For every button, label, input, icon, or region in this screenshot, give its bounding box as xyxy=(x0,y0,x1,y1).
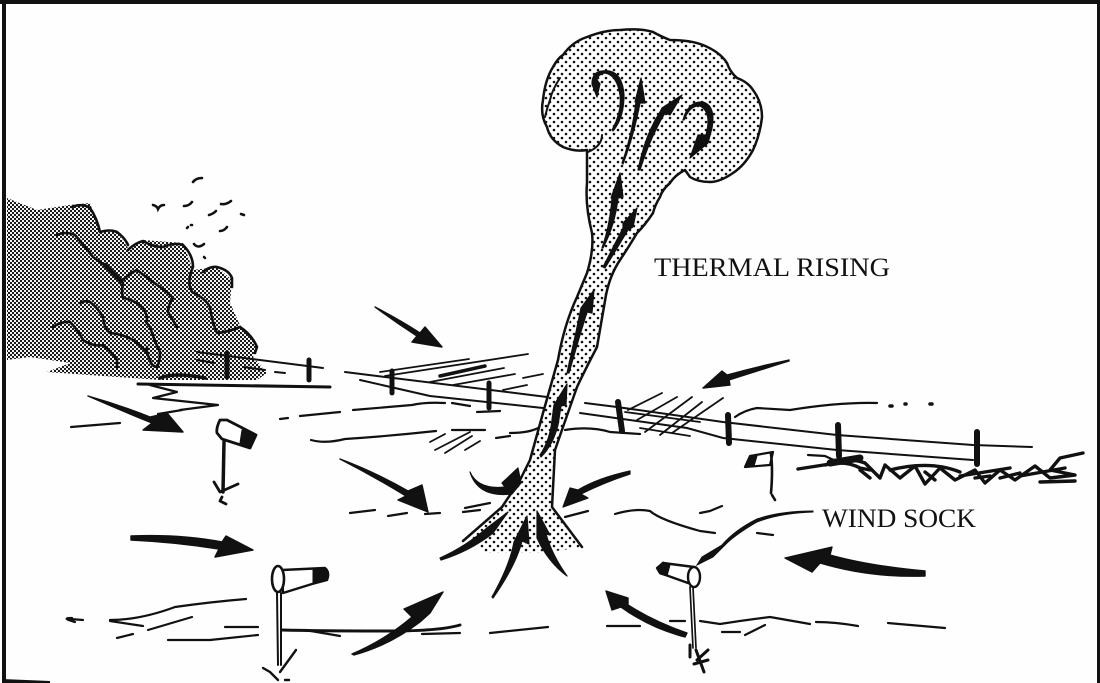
thermal outline xyxy=(463,29,762,547)
tree contour lines xyxy=(53,205,257,367)
leader line from wind sock label to sock xyxy=(697,511,813,565)
thermal column with stippled mushroom cap xyxy=(463,29,762,553)
distant bush strip xyxy=(798,404,1083,484)
tree line with dark screen tone xyxy=(7,198,267,380)
root arrows at base of thermal xyxy=(440,468,630,598)
label: wind sock: WIND SOCK xyxy=(822,504,976,533)
field hatch marks xyxy=(380,354,723,453)
wind sock: upper left xyxy=(214,420,256,504)
wind sock: lower right xyxy=(657,562,708,672)
cap inner marks xyxy=(545,78,602,152)
fence wires xyxy=(197,352,1032,460)
label: thermal rising: THERMAL RISING xyxy=(654,253,890,282)
thermal flow arrows inside column xyxy=(540,71,713,457)
fence with posts and wires xyxy=(197,352,1032,464)
wind sock: far right xyxy=(745,452,775,500)
ground lines xyxy=(67,375,945,640)
fence posts xyxy=(227,353,977,464)
birds xyxy=(153,178,244,258)
wind sock: lower left xyxy=(263,566,329,680)
inflowing wind arrows xyxy=(88,307,925,655)
